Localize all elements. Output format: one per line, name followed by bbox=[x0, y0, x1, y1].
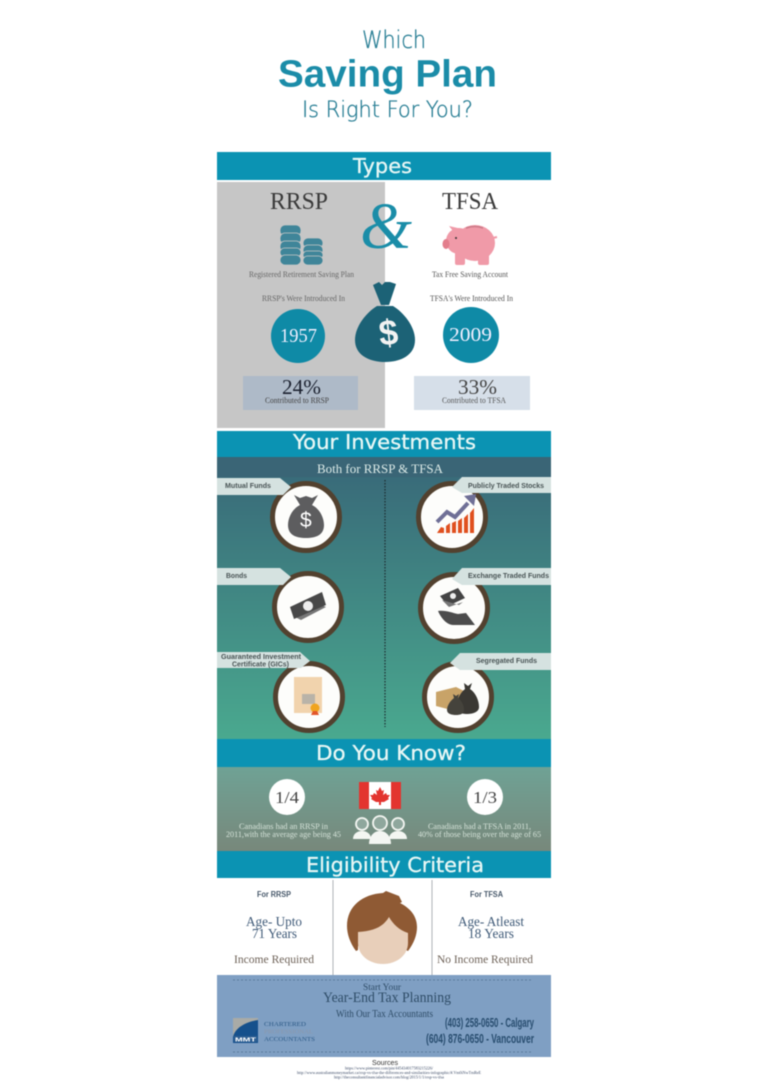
panel: call to action bbox=[217, 975, 551, 1057]
panel: investments bbox=[217, 457, 551, 739]
panel: eligibility bbox=[234, 880, 533, 975]
icon: money bag: $ bbox=[377, 311, 400, 354]
stat: 1/3: 1/3 bbox=[473, 788, 497, 807]
ampersand: & bbox=[360, 190, 413, 263]
item: Bonds: Bonds bbox=[226, 573, 247, 580]
logo: MMT: MMT bbox=[235, 1038, 257, 1044]
logo: MMT: CHARTERED bbox=[264, 1021, 306, 1028]
sources: https://www.pinterest.com/pin/445434017583215226/ bbox=[345, 1066, 434, 1070]
heading: Eligibility Criteria: Eligibility Criteria bbox=[306, 853, 484, 877]
TFSA share box: Contributed to TFSA bbox=[442, 396, 506, 405]
title bbox=[278, 26, 497, 123]
item: Exchange Traded Funds bbox=[420, 568, 551, 642]
heading: Types bbox=[217, 152, 551, 180]
subheading: Both for RRSP & TFSA bbox=[317, 461, 444, 476]
tax planning text: Year-End Tax Planning bbox=[323, 990, 451, 1006]
RRSP heading: RRSP bbox=[270, 189, 328, 215]
tax planning text: Start Your bbox=[363, 982, 401, 992]
RRSP criteria bbox=[234, 890, 314, 966]
phone numbers: (604) 876-0650 - Vancouver bbox=[426, 1031, 534, 1046]
TFSA share box: 33% bbox=[458, 375, 497, 399]
TFSA criteria bbox=[437, 890, 533, 966]
panel: types comparison bbox=[217, 182, 530, 428]
panel: do you know bbox=[217, 767, 551, 851]
stat: 1/4: 1/4 bbox=[275, 788, 300, 807]
item: Exchange Traded Funds: Exchange Traded Funds bbox=[468, 573, 549, 580]
title: Which bbox=[362, 26, 426, 54]
stat: 1/3 bbox=[418, 779, 541, 839]
heading: Do You Know? bbox=[217, 739, 551, 767]
stat: 1/4 bbox=[226, 779, 341, 839]
TFSA heading: TFSA bbox=[442, 189, 499, 215]
RRSP criteria: For RRSP bbox=[257, 890, 292, 899]
RRSP criteria: Age- Upto bbox=[246, 915, 302, 930]
1957 badge bbox=[271, 309, 325, 363]
stat: 1/4: Canadians had an RRSP in bbox=[239, 822, 328, 831]
heading: Eligibility Criteria bbox=[217, 851, 551, 878]
item: Mutual Funds: Mutual Funds bbox=[225, 483, 271, 490]
heading: Your Investments bbox=[217, 430, 551, 457]
RRSP share box: Contributed to RRSP bbox=[265, 396, 330, 405]
GIC label: Certificate (GICs) bbox=[232, 662, 289, 668]
RRSP introduced: RRSP's Were Introduced In bbox=[262, 294, 345, 303]
RRSP share box bbox=[243, 375, 358, 410]
tax planning text: With Our Tax Accountants bbox=[336, 1008, 433, 1020]
icon: money bag bbox=[355, 282, 415, 362]
1957 badge: 1957 bbox=[280, 325, 317, 347]
TFSA criteria: No Income Required bbox=[437, 952, 533, 966]
icon: coin stacks bbox=[280, 225, 323, 265]
RRSP criteria: 71 Years bbox=[252, 927, 297, 942]
heading: Your Investments: Your Investments bbox=[292, 430, 476, 454]
logo: MMT: PROFESSIONAL bbox=[264, 1028, 313, 1036]
title: Is Right For You? bbox=[302, 98, 473, 123]
2009 badge bbox=[443, 307, 499, 363]
item: Publicly Traded Stocks bbox=[418, 477, 551, 550]
GIC label bbox=[221, 654, 302, 668]
sources: http://theconsultantfinancialadvisor.com/blog/2015/1/1/rrsp-vs-tfsa bbox=[334, 1074, 444, 1080]
icon: people bbox=[353, 816, 407, 844]
TFSA criteria: For TFSA bbox=[470, 890, 503, 899]
item: Mutual Funds: $ bbox=[300, 509, 312, 532]
item: Segregated Funds bbox=[424, 653, 551, 730]
sources bbox=[297, 1058, 482, 1080]
RRSP full name: Registered Retirement Saving Plan bbox=[249, 270, 354, 279]
stat: 1/3: 40% of those being over the age of 65 bbox=[418, 830, 541, 839]
heading: Do You Know?: Do You Know? bbox=[316, 741, 466, 765]
phone numbers: (403) 258-0650 - Calgary bbox=[445, 1015, 534, 1030]
icon: face bbox=[347, 891, 417, 964]
logo: MMT: ACCOUNTANTS bbox=[264, 1036, 315, 1043]
TFSA criteria: 18 Years bbox=[468, 927, 514, 942]
icon: piggy bank bbox=[442, 225, 497, 265]
item: Bonds bbox=[217, 568, 342, 640]
phone numbers bbox=[426, 1015, 534, 1046]
item: Publicly Traded Stocks: Publicly Traded Stocks bbox=[468, 483, 544, 490]
sources: Sources bbox=[372, 1058, 398, 1067]
GIC label: Guaranteed Investment bbox=[221, 654, 302, 661]
TFSA share box bbox=[414, 375, 530, 410]
TFSA full name: Tax Free Saving Account bbox=[432, 270, 509, 279]
heading: Types: Types bbox=[352, 154, 412, 178]
stat: 1/3: Canadians had a TFSA in 2011, bbox=[428, 822, 531, 831]
TFSA criteria: Age- Atleast bbox=[458, 915, 524, 930]
stat: 1/4: 2011,with the average age being 45 bbox=[226, 830, 341, 839]
item: Mutual Funds bbox=[217, 478, 340, 550]
logo: MMT bbox=[233, 1018, 315, 1044]
RRSP criteria: Income Required bbox=[234, 952, 314, 966]
title: Saving Plan bbox=[278, 54, 497, 96]
item: GICs bbox=[217, 652, 342, 730]
item: Segregated Funds: Segregated Funds bbox=[476, 658, 537, 665]
sources: http://www.australianmoneymarket.ca/rrsp-vs-tfsa-the-differences-and-similarities-infographic/#.Vm0iNwTmReE bbox=[297, 1070, 482, 1075]
2009 badge: 2009 bbox=[449, 324, 492, 346]
icon: Canadian flag bbox=[359, 782, 401, 809]
tax planning text bbox=[323, 982, 451, 1020]
RRSP share box: 24% bbox=[282, 375, 321, 399]
TFSA introduced: TFSA's Were Introduced In bbox=[430, 294, 513, 303]
